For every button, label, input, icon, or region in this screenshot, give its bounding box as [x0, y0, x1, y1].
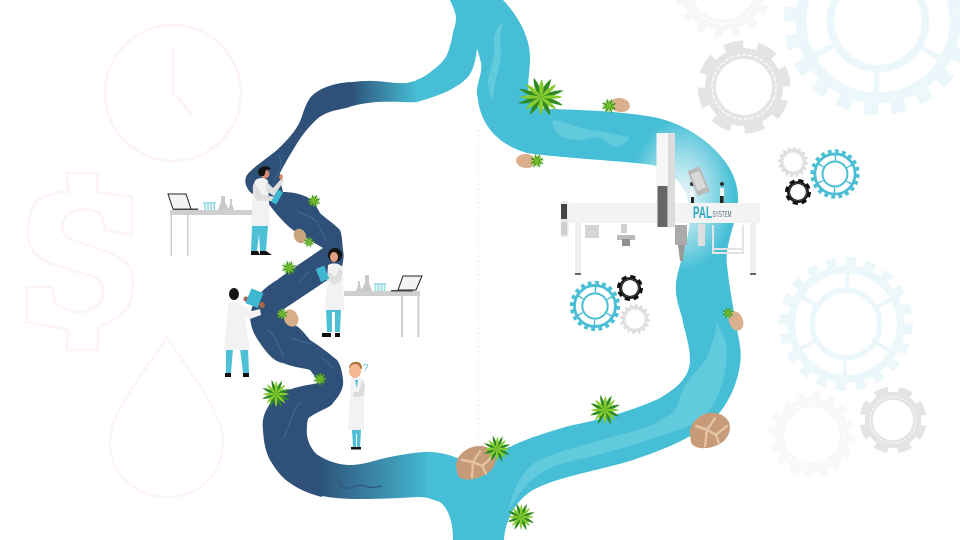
- gear: faint grey lower: [773, 396, 851, 474]
- laptop: [168, 194, 198, 210]
- lower river wave mark: [338, 478, 381, 488]
- head: [260, 170, 270, 178]
- plant upper left river: [307, 194, 321, 208]
- plant small near rock: [601, 98, 617, 114]
- plant lower left small: [313, 372, 327, 386]
- test tube rack: [374, 283, 386, 291]
- small figures on rail: [690, 182, 724, 204]
- PAL SYSTEM logo: PAL: [693, 203, 712, 222]
- bench: [344, 291, 420, 337]
- rock left river: [291, 227, 309, 245]
- clipboard: [245, 288, 263, 308]
- scientist three: [224, 288, 265, 377]
- rock mid left: [281, 307, 301, 329]
- gear: pale blue large top right: [790, 0, 960, 109]
- river: automated teal path: [416, 0, 741, 540]
- gear: pale blue mid right: [784, 262, 908, 386]
- coat: [325, 263, 344, 310]
- background icon: clock: [105, 25, 241, 161]
- background icon: dollar sign: [27, 173, 133, 350]
- rock right bank: [726, 309, 746, 333]
- shoes: [322, 333, 340, 337]
- legs: [352, 430, 361, 447]
- rocks and plants: [262, 77, 746, 531]
- gear: faint grey top: [678, 0, 768, 33]
- background icon: water drop: [110, 337, 223, 497]
- arm: [326, 268, 343, 285]
- plant on left rock: [303, 236, 315, 248]
- arm: [241, 304, 261, 319]
- plant mid left rock: [276, 308, 288, 320]
- face: [349, 364, 361, 378]
- plant lower left large: [262, 380, 290, 408]
- scientist one: [251, 166, 284, 255]
- gear: grey lower right: [858, 385, 928, 455]
- hair: [258, 166, 271, 176]
- plant beside rock: [530, 154, 544, 168]
- clipboard: [316, 266, 329, 282]
- flasks: [356, 275, 372, 291]
- plant bottom: [507, 503, 535, 531]
- scientist two: [316, 248, 344, 337]
- arms: [253, 178, 284, 201]
- plant on rock: [484, 435, 510, 462]
- rock under river: [515, 153, 537, 169]
- hand: [259, 302, 265, 308]
- gear cluster lower left of system: [572, 276, 649, 333]
- coat: [224, 302, 250, 350]
- river highlights: [488, 23, 727, 513]
- shoes: [225, 373, 249, 377]
- device held by figures: [688, 166, 710, 196]
- left module: [561, 201, 568, 237]
- question mark: ?: [363, 363, 369, 374]
- bench: [170, 210, 252, 256]
- hair: [349, 362, 362, 369]
- river current marks: [268, 155, 332, 438]
- vertical column: [656, 133, 675, 227]
- PAL system instrument: [561, 133, 760, 275]
- laptop: [391, 276, 422, 292]
- legs: [251, 226, 268, 251]
- tie: [355, 380, 358, 388]
- arms: [353, 380, 365, 397]
- river: dark manual path: [245, 82, 350, 497]
- tray frame: [713, 225, 743, 253]
- coat: [348, 378, 364, 430]
- plant middle lower river: [590, 395, 620, 425]
- glow behind PAL system: [630, 119, 734, 271]
- dotted centre line: [478, 130, 480, 440]
- large rock centre: [455, 444, 497, 481]
- legs: [575, 223, 756, 275]
- scientist four with question mark: [348, 362, 369, 450]
- plant middle left: [281, 260, 297, 276]
- shoes: [251, 251, 272, 255]
- gear cluster upper right: [779, 148, 858, 204]
- rock upper: [609, 96, 631, 114]
- river: upper gradient: [345, 80, 418, 108]
- hair: [328, 248, 342, 262]
- right lab bench: [344, 275, 422, 337]
- plant right bank: [722, 307, 734, 319]
- gear: grey upper: [691, 34, 797, 140]
- left lab bench: [168, 194, 252, 256]
- river: lower gradient: [318, 452, 460, 505]
- plant large top: [518, 77, 564, 116]
- PAL SYSTEM logo: SYSTEM: [712, 210, 732, 219]
- large rock right: [690, 413, 730, 448]
- legs: [326, 309, 341, 332]
- flasks: [218, 196, 234, 210]
- face: [330, 252, 338, 262]
- hands and clipboard: [271, 189, 283, 205]
- legs: [226, 349, 249, 373]
- test tube rack: [203, 202, 216, 210]
- modules under rail: [585, 224, 705, 261]
- head: [229, 288, 239, 300]
- coat: [251, 178, 270, 226]
- main rail: [568, 203, 760, 223]
- shoes: [351, 447, 361, 450]
